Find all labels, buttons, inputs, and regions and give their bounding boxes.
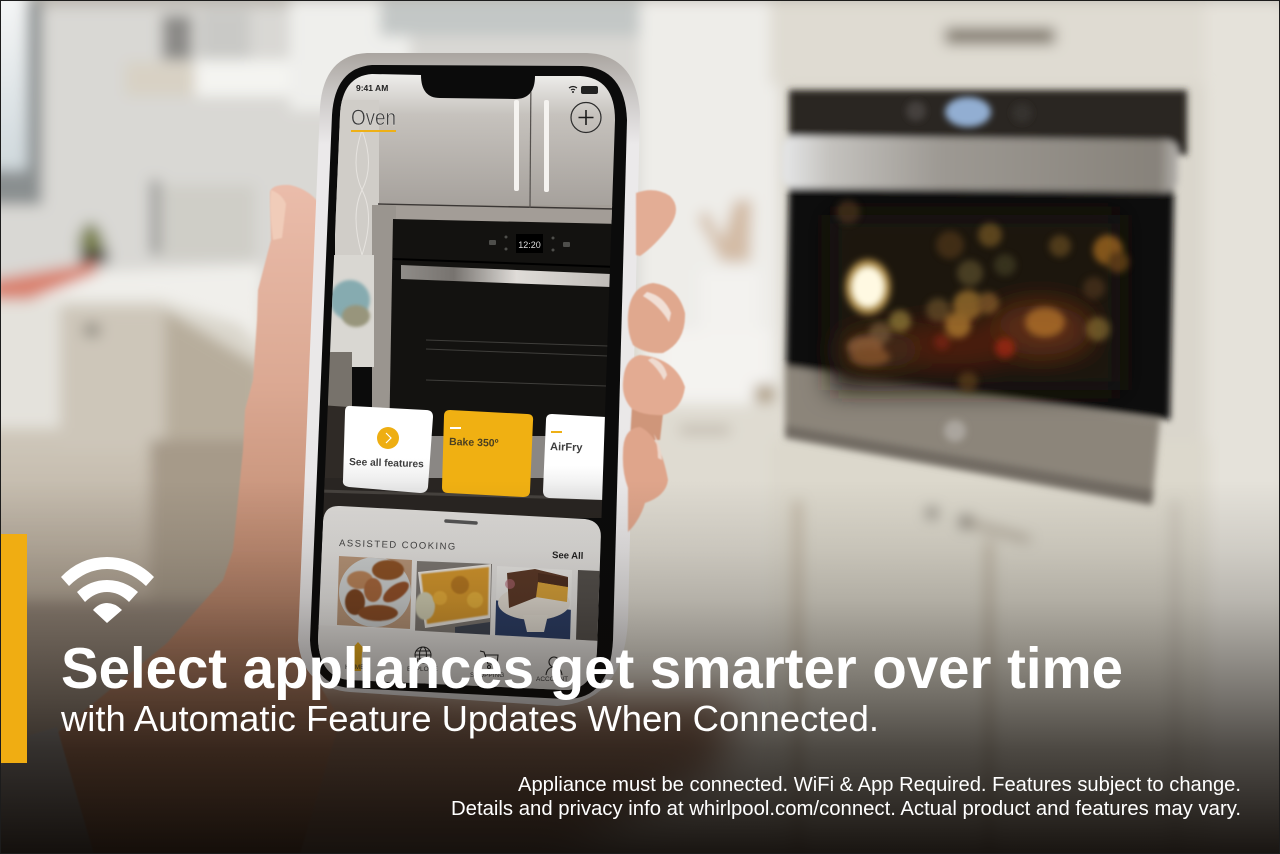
card: see all features: [343, 406, 433, 493]
smartphone: [298, 53, 640, 706]
bottom navigation bar: [318, 625, 598, 690]
card: AirFry: AirFry: [550, 441, 584, 454]
status bar: [356, 85, 598, 94]
icon: wifi: [61, 557, 154, 623]
food photo: cropped dish: [576, 570, 600, 641]
yellow accent bar: [1, 534, 27, 763]
card: AirFry: [543, 414, 606, 500]
AR kitchen scene: 12:20: [518, 240, 541, 250]
heading: Select appliances get smarter over time: [61, 637, 1123, 701]
assisted cooking sheet: See All: [552, 550, 584, 562]
disclaimer text: Details and privacy info at whirlpool.com/connect. Actual product and features may vary.: [451, 798, 1241, 820]
fingernails: [643, 292, 671, 322]
card: Bake 350: [442, 410, 533, 497]
card: see all features: See all features: [349, 457, 424, 470]
phone case: [298, 53, 640, 706]
subheading: with Automatic Feature Updates When Connected.: [60, 698, 879, 739]
food photo: roast chicken: [335, 555, 415, 631]
bottom navigation bar: ACCOUNT: [536, 676, 568, 683]
icon: account: [546, 657, 562, 675]
icon: add button: [571, 102, 601, 132]
AR kitchen scene: [310, 70, 620, 518]
assisted cooking sheet: ASSISTED COOKING: [339, 538, 457, 553]
hand holding the phone: [0, 185, 735, 854]
disclaimer text: Appliance must be connected. WiFi & App Required. Features subject to change.: [518, 774, 1241, 796]
icon: shopping cart: [480, 651, 498, 668]
icon: explore globe: [415, 647, 431, 663]
fingers wrapping the phone edge: [623, 190, 685, 532]
title: Oven: Oven: [351, 105, 396, 130]
status bar: 9:41 AM: [356, 83, 388, 93]
bottom navigation bar: EXPLORE: [407, 666, 438, 673]
blurred wall oven: [782, 90, 1187, 505]
thumb and palm: [57, 185, 340, 854]
sleeve cuff: [0, 727, 95, 854]
disclaimer text: [451, 774, 1241, 820]
assisted cooking sheet: [315, 506, 601, 700]
bottom navigation bar: HOME: [345, 664, 365, 671]
bottom dark gradient overlay: [0, 480, 1280, 854]
bottom navigation bar: SHOPPING: [470, 672, 504, 679]
glowing food bokeh seen through oven window: [830, 200, 1129, 392]
phone screen: [310, 70, 620, 700]
food photo: casserole: [413, 560, 493, 636]
icon: home: [354, 642, 367, 671]
oven display: [906, 97, 1032, 442]
title: Oven: [351, 109, 396, 132]
blurred wrist and arm under the phone: [120, 680, 735, 854]
phone bezel: [310, 65, 627, 699]
card: Bake 350: Bake 350º: [449, 436, 499, 450]
thumbnail: [270, 190, 286, 240]
food photo: layer cake: [493, 565, 573, 642]
